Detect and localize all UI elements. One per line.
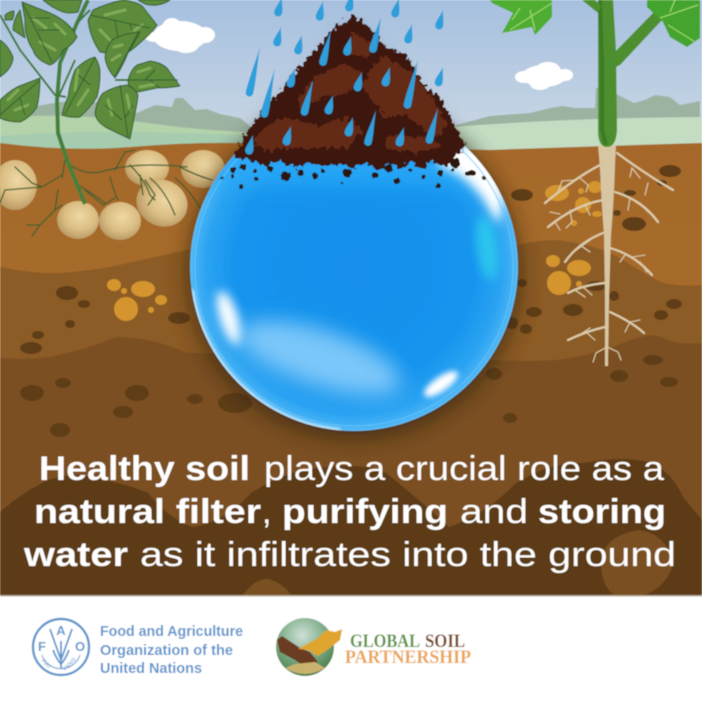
stem shading — [600, 0, 606, 145]
footer — [0, 595, 702, 702]
soil specks — [220, 158, 486, 189]
highlight upper right — [438, 145, 503, 225]
leaves — [490, 0, 700, 47]
headline: Healthy soil — [39, 450, 250, 488]
FAO name — [100, 623, 243, 677]
roots — [0, 150, 212, 236]
soil layer 2 — [0, 240, 702, 596]
FAO logo: A — [56, 623, 66, 638]
soft glow lower — [231, 305, 409, 411]
Global Soil Partnership name: SOIL — [425, 631, 465, 652]
lighter soil blobs — [242, 530, 673, 596]
headline: natural filter — [34, 493, 261, 531]
headline: as it infiltrates into the ground — [140, 536, 676, 574]
FAO logo: FIAT — [40, 658, 52, 671]
headline: purifying — [282, 493, 448, 531]
cloud left — [145, 18, 215, 53]
taproot — [598, 145, 616, 366]
FAO name: United Nations — [100, 660, 202, 677]
side branches — [582, 0, 662, 68]
FAO logo: O — [75, 639, 85, 654]
teal glow — [473, 215, 501, 281]
potatoes — [0, 150, 225, 240]
raindrops — [244, 0, 447, 155]
Global Soil Partnership name — [345, 631, 471, 668]
FAO logo — [33, 619, 89, 675]
Global Soil Partnership name: PARTNERSHIP — [345, 647, 471, 668]
inner rim — [194, 148, 514, 427]
FAO name: Food and Agriculture — [100, 623, 243, 640]
cloud right — [515, 62, 573, 90]
nutrient blobs left — [107, 279, 167, 321]
drop shadow — [187, 105, 521, 439]
soil pebbles — [20, 165, 682, 437]
stem — [57, 0, 88, 204]
leaves — [0, 0, 180, 139]
lower left rim light — [192, 290, 340, 430]
top light band — [190, 150, 520, 186]
branches — [0, 10, 135, 100]
soil pile — [234, 15, 466, 170]
sky — [0, 0, 702, 150]
dark soil mounds — [0, 459, 702, 596]
pile shadow — [225, 25, 480, 160]
main stem — [598, 0, 617, 147]
FAO logo: F — [38, 639, 46, 654]
FAO name: Organization of the — [100, 642, 233, 659]
distant hills — [0, 86, 700, 135]
headline — [23, 450, 676, 574]
highlight lower right — [421, 367, 461, 401]
headline: storing — [538, 493, 666, 531]
Global Soil Partnership name: GLOBAL — [350, 631, 420, 652]
highlight left — [212, 289, 246, 347]
bean plant — [490, 0, 700, 366]
topsoil — [0, 143, 702, 596]
headline: water — [23, 536, 128, 574]
headline: and — [460, 493, 528, 531]
Global Soil Partnership logo — [276, 618, 342, 676]
lateral roots — [545, 153, 673, 362]
FAO logo: PANIS — [62, 657, 78, 672]
headline: , — [262, 493, 271, 531]
nutrient blobs right — [545, 181, 602, 295]
green fields — [0, 116, 702, 152]
water sphere — [189, 145, 519, 432]
soil layer 3 — [0, 335, 702, 596]
headline: plays a crucial role as a — [264, 450, 664, 488]
potato plant — [0, 0, 225, 240]
